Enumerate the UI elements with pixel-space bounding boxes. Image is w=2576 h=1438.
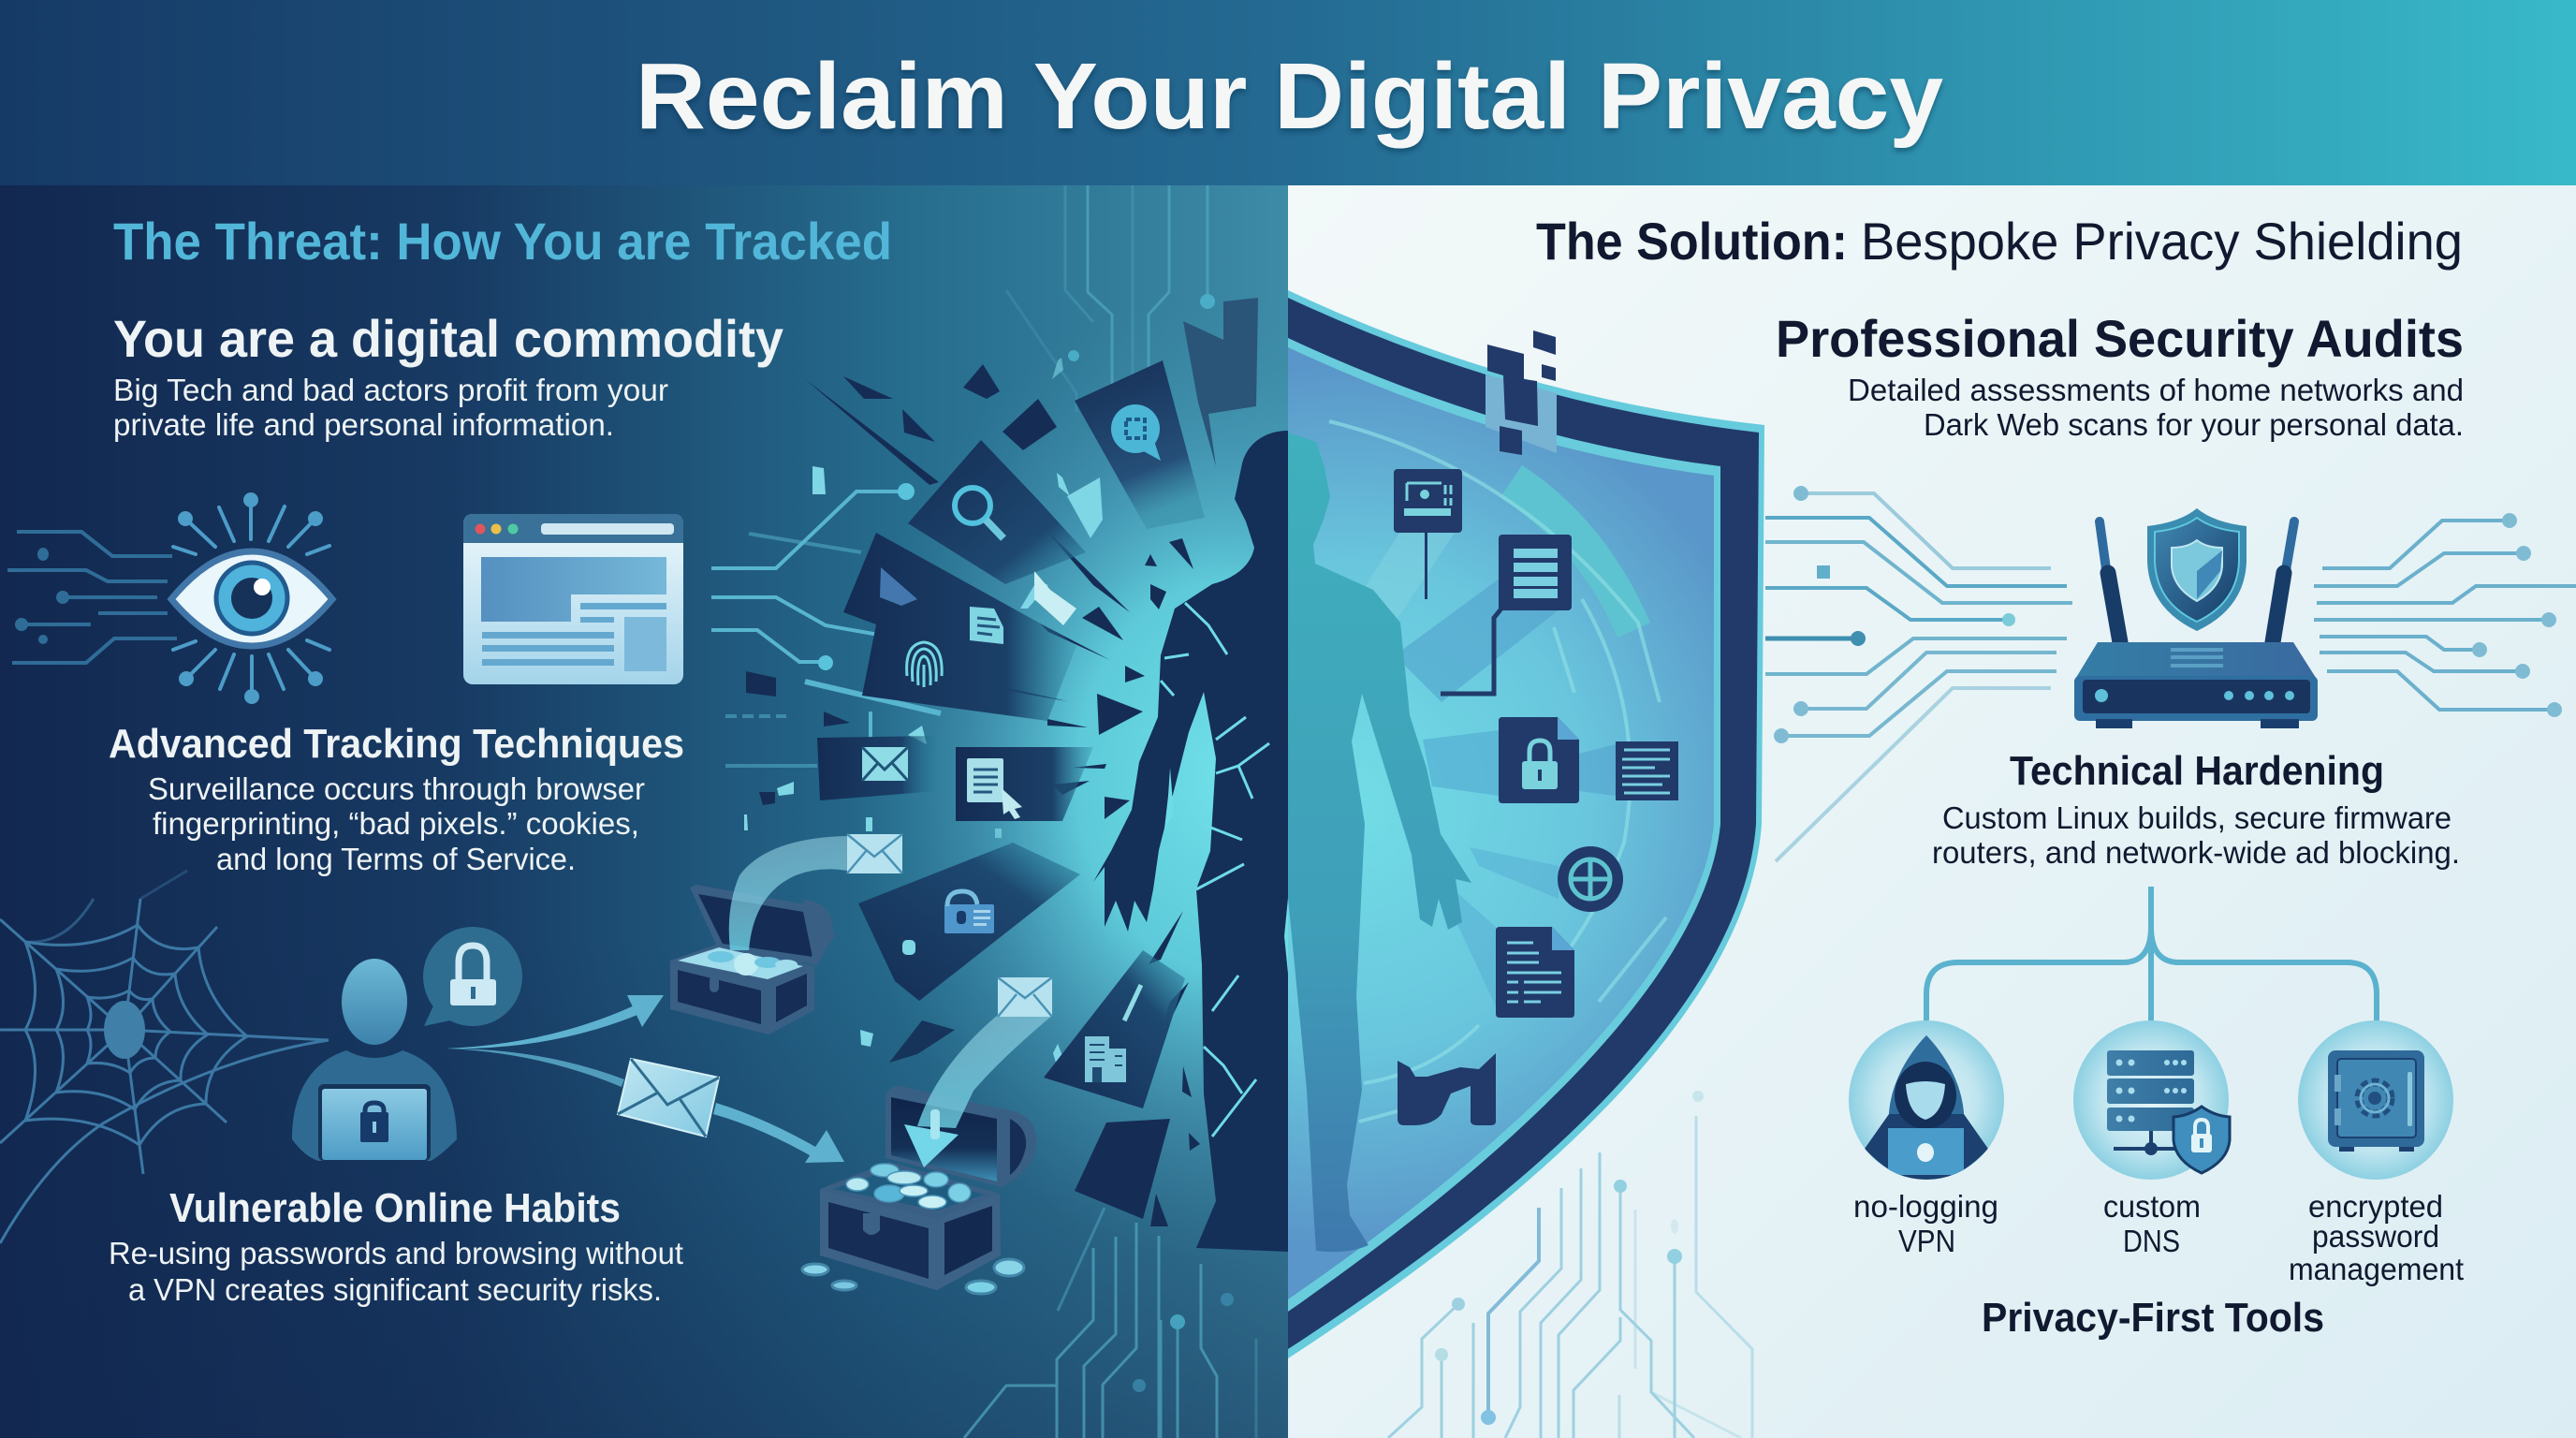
circuit lines: top of fan xyxy=(1006,185,1215,412)
panel: threat (left) xyxy=(0,185,1288,1438)
shield xyxy=(1284,290,1764,1358)
panel: solution (right) xyxy=(1284,185,2576,1438)
stream: to chest 1 xyxy=(729,836,847,950)
text: tracking description: fingerprinting, “bad pixels.” cookies, xyxy=(153,806,639,841)
icon: person with laptop xyxy=(292,959,457,1161)
arrow: person to small chest xyxy=(446,995,664,1049)
circuit lines: bottom xyxy=(964,1208,1256,1438)
heading: tracking techniques: Advanced Tracking Techniques xyxy=(109,721,684,767)
icon: password safe xyxy=(2298,1020,2453,1180)
shards: dark fragments xyxy=(746,364,1200,1226)
icon: DNS server xyxy=(2073,1020,2230,1180)
icon: envelope lower stream xyxy=(998,977,1052,1017)
circuit lines: mid left of fan xyxy=(711,483,941,766)
labels: privacy tools xyxy=(1853,1189,2464,1286)
heading: privacy-first tools: Privacy-First Tools xyxy=(1982,1295,2324,1341)
panel shard: padlock xyxy=(858,843,1080,1001)
icon: hooded VPN user xyxy=(1849,1020,2004,1181)
text: commodity description xyxy=(113,373,668,442)
icon: speech bubble with padlock xyxy=(423,927,522,1026)
icon: crosshair badge xyxy=(1558,846,1623,912)
text: tracking description xyxy=(148,771,645,876)
icon: browser window xyxy=(463,514,683,684)
icon: treasure chest small xyxy=(670,885,835,1034)
cracks xyxy=(1161,603,1269,1137)
heading: digital commodity: You are a digital commodity xyxy=(113,309,783,368)
header band xyxy=(0,0,2576,185)
text: hardening description: Custom Linux builds, secure firmware xyxy=(1942,800,2452,835)
text: habits description xyxy=(109,1236,683,1307)
panel shard: building xyxy=(1044,950,1185,1108)
text: commodity description: private life and personal information. xyxy=(113,407,614,442)
labels: privacy tools: VPN xyxy=(1898,1224,1955,1258)
text: habits description: Re-using passwords and browsing without xyxy=(109,1236,683,1270)
panel shard: document with cursor xyxy=(956,747,1093,821)
heading: solution: The Solution: xyxy=(1536,212,1848,271)
labels: privacy tools: encrypted xyxy=(2308,1189,2443,1224)
icon: envelope upper stream xyxy=(847,834,902,873)
connector: tools tree xyxy=(1926,887,2377,1020)
labels: privacy tools: DNS xyxy=(2123,1224,2180,1258)
labels: privacy tools: no-logging xyxy=(1853,1189,1998,1224)
text: audits description: Detailed assessments of home networks and xyxy=(1848,373,2464,407)
labels: privacy tools: management xyxy=(2289,1252,2464,1286)
labels: privacy tools: password xyxy=(2312,1219,2439,1254)
heading: technical hardening: Technical Hardening xyxy=(2010,748,2384,794)
arrow: person to large chest xyxy=(446,1049,844,1163)
panel shard: fingerprint and document xyxy=(843,533,1076,721)
text: hardening description: routers, and network-wide ad blocking. xyxy=(1932,835,2460,870)
text: audits description: Dark Web scans for your personal data. xyxy=(1924,407,2464,442)
icon: eye xyxy=(171,494,332,702)
heading: bespoke shielding: Bespoke Privacy Shielding xyxy=(1861,212,2463,271)
circuit lines: router left xyxy=(1765,486,2072,861)
labels: privacy tools: custom xyxy=(2103,1189,2201,1224)
text: habits description: a VPN creates significant security risks. xyxy=(128,1272,662,1307)
text: hardening description xyxy=(1932,800,2460,870)
icon: document xyxy=(1496,927,1574,1018)
icon: envelope on arrow xyxy=(618,1059,719,1137)
panel shard: envelope xyxy=(817,736,937,800)
icon: locked file xyxy=(1499,717,1579,803)
text: tracking description: Surveillance occurs through browser xyxy=(148,771,645,806)
icon: server list xyxy=(1441,535,1572,694)
inner figure xyxy=(1288,433,1471,1252)
circuit lines: below shield xyxy=(1388,1091,1752,1438)
heading: threat: The Threat: How You are Tracked xyxy=(113,212,892,271)
icon: broken shape xyxy=(1398,1053,1496,1125)
heading: online habits: Vulnerable Online Habits xyxy=(169,1185,621,1231)
title: Reclaim Your Digital Privacy xyxy=(636,44,1943,149)
icon: text panel xyxy=(1616,741,1678,800)
silhouette: exposed person xyxy=(1093,431,1288,1252)
icon: treasure chest large xyxy=(802,1015,1053,1294)
circuit lines: beside eye xyxy=(7,532,177,663)
heading: security audits: Professional Security Audits xyxy=(1776,309,2464,368)
circuit lines: router right xyxy=(2314,513,2576,717)
text: audits description xyxy=(1848,373,2464,442)
icon: router with shield xyxy=(2074,508,2318,728)
icon: spider web xyxy=(0,871,329,1243)
panel shard: magnifier xyxy=(908,440,1086,625)
icon: laptop sign xyxy=(1394,469,1462,599)
panel shard: lower xyxy=(1075,1119,1170,1219)
text: tracking description: and long Terms of Service. xyxy=(216,842,576,876)
stream: to chest 2 xyxy=(917,1015,1053,1128)
top dark shard xyxy=(1183,298,1258,466)
text: commodity description: Big Tech and bad actors profit from your xyxy=(113,373,668,407)
rays and arcs xyxy=(1329,421,1666,1122)
shards: cyan fragments xyxy=(744,358,1103,1062)
panel shard: chat bubble xyxy=(1075,360,1205,529)
